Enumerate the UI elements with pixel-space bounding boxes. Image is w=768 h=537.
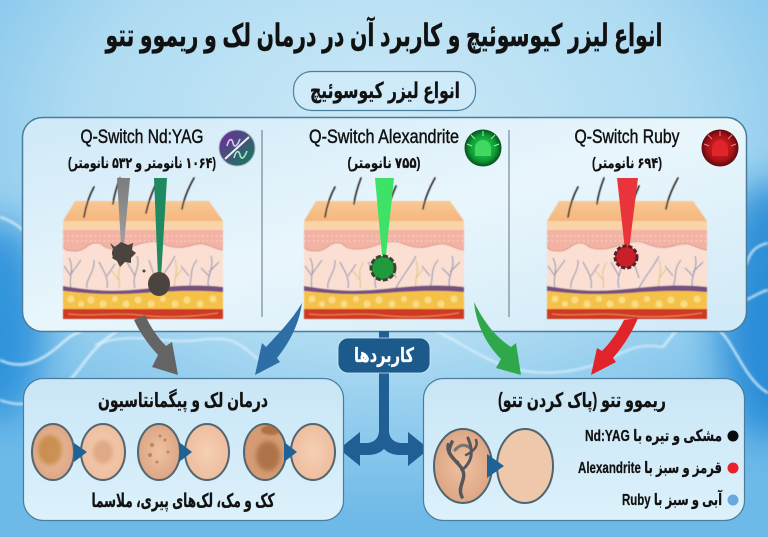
label: applications: [338, 338, 430, 373]
icon: red siren: [702, 130, 738, 166]
panel: laser types: [22, 118, 746, 332]
column: Q-Switch Ruby: [547, 127, 738, 319]
before/after pair 2: [138, 424, 229, 480]
arrow: gray Nd:YAG to pigmentation: [134, 315, 178, 375]
before/after pair 1: [32, 424, 125, 480]
legend: Alexandrite: قرمز و سبز با Alexandrite: [578, 460, 722, 477]
before/after pair 3: [244, 424, 335, 480]
panel: tattoo removal: [424, 378, 744, 520]
arrow: green Alexandrite to tattoo removal: [474, 302, 521, 375]
column: Q-Switch Nd:YAG: [63, 127, 255, 319]
wavelength: Alexandrite: (۷۵۵ نانومتر): [348, 155, 420, 172]
heading: tattoo removal: ریموو تتو (پاک کردن تتو): [498, 390, 666, 413]
wavelength: Ruby: (۶۹۴ نانومتر): [592, 155, 662, 172]
skin diagram: Ruby: [547, 177, 707, 319]
connector: applications tree: [339, 331, 429, 466]
arrow: red Ruby to tattoo removal: [591, 318, 638, 375]
label: applications: کاربردها: [354, 345, 414, 367]
icon: dual wavelength: [219, 130, 255, 166]
before/after tattoo: [434, 429, 553, 503]
legend: Nd:YAG: مشکی و تیره با Nd:YAG: [585, 428, 722, 445]
caption: conditions: کک و مک، لک‌های پیری، ملاسما: [92, 491, 275, 512]
skin diagram: Alexandrite: [304, 177, 464, 319]
icon: green siren: [464, 130, 502, 166]
section heading pill: انواع لیزر کیوسوئیچ: [310, 78, 460, 104]
column: Q-Switch Alexandrite: [304, 127, 502, 319]
wavelength: Nd:YAG: (۱۰۶۴ نانومتر و ۵۳۲ نانومتر): [68, 155, 216, 172]
heading: Alexandrite: Q-Switch Alexandrite: [309, 127, 459, 148]
legend: Ruby: آبی و سبز با Ruby: [622, 489, 722, 509]
arrow: blue Alexandrite to pigmentation: [255, 303, 302, 375]
heading: Ruby: Q-Switch Ruby: [574, 127, 680, 148]
heading: pigmentation: درمان لک و پیگمانتاسیون: [98, 388, 268, 413]
heading: Nd:YAG: Q-Switch Nd:YAG: [80, 127, 204, 148]
panel: pigmentation treatment: [24, 378, 344, 520]
section heading pill: [294, 72, 476, 110]
skin diagram: Nd:YAG: [63, 178, 223, 319]
